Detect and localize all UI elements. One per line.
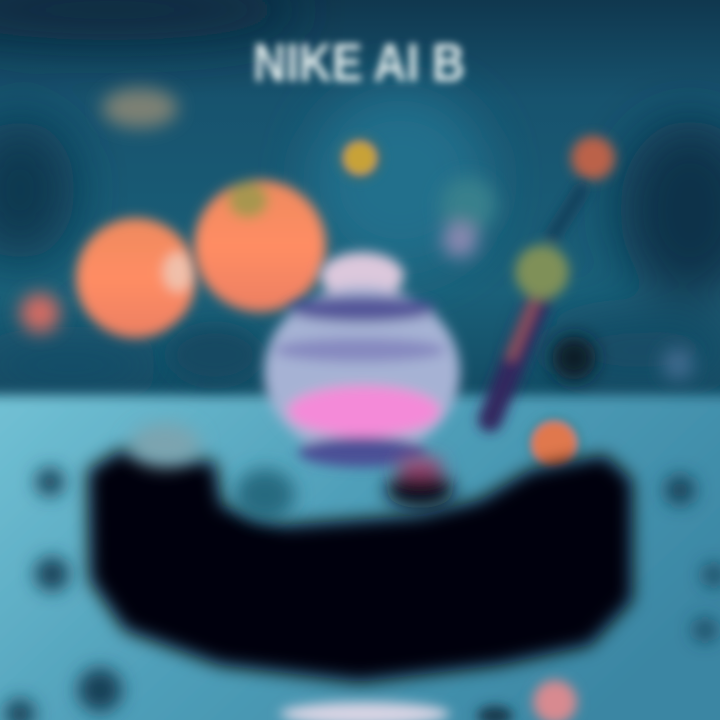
orange dot far left — [20, 293, 60, 333]
striped jar — [264, 252, 460, 467]
bottom glow: pale bar and pink dot — [280, 680, 577, 720]
jar mid stripe — [274, 338, 446, 362]
title: NIKE AI B — [253, 33, 465, 93]
dark patch below orange spheres — [170, 327, 260, 383]
icon: faded purple dot right — [662, 348, 694, 380]
floor dots — [5, 468, 720, 720]
icon: faded teal and lilac ring — [440, 177, 496, 258]
background: dark side haze — [0, 0, 720, 387]
orange sphere: centre — [194, 180, 326, 312]
jar top stripe — [288, 296, 436, 322]
label: blurred tag top left — [102, 88, 178, 128]
icon: dark circle by wand — [552, 336, 596, 380]
jar base stripe — [298, 437, 426, 467]
jar pink glow — [288, 386, 440, 436]
background: dark teal sky — [0, 0, 720, 400]
icon: orange circle top right — [571, 136, 615, 180]
black bowl — [88, 450, 632, 682]
icon: orange circle lower right — [526, 415, 584, 473]
wand: diagonal stick with dots — [490, 185, 585, 420]
icon: yellow circle — [335, 133, 385, 183]
background: light blue floor — [0, 395, 720, 720]
orange sphere: left — [76, 218, 196, 338]
jar body — [264, 286, 460, 458]
jar lid — [320, 252, 404, 300]
bowl rim highlight — [129, 423, 454, 521]
